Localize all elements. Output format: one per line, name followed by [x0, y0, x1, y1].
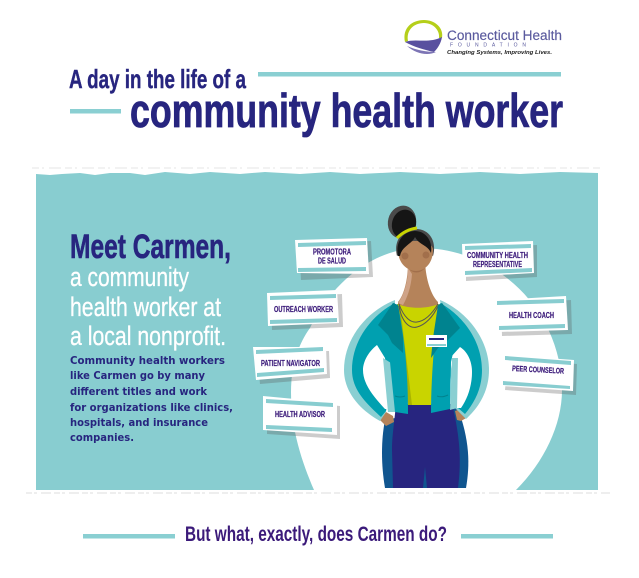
figure: Carmen [344, 202, 489, 488]
text block: Meet Carmen intro: hospitals, and insurance [70, 417, 208, 429]
necklace [399, 304, 438, 322]
text block: Meet Carmen intro: health worker at [70, 292, 221, 322]
head [398, 241, 433, 271]
yellow shirt [397, 304, 439, 405]
card: Community Health Representative: REPRESENTATIVE [473, 260, 522, 269]
text block: Meet Carmen intro: companies. [70, 432, 134, 444]
card: Promotora de Salud: DE SALUD [318, 256, 346, 266]
name tag [426, 335, 447, 347]
right sleeve [440, 300, 489, 419]
card: Outreach Worker [267, 290, 343, 330]
logo: Connecticut Health Foundation: FOUNDATION [450, 42, 526, 48]
text block: Meet Carmen intro: for organizations like clinics, [70, 402, 233, 414]
torn bottom edge [385, 488, 468, 492]
card: Patient Navigator: PATIENT NAVIGATOR [261, 359, 320, 368]
bun [384, 202, 420, 242]
text block: Meet Carmen intro: a local nonprofit. [70, 321, 226, 351]
card: Community Health Representative [462, 241, 537, 281]
card: Peer Counselor: PEER COUNSELOR [512, 364, 564, 376]
logo: Connecticut Health Foundation: Connecticut Health [447, 28, 562, 43]
hair band [397, 228, 417, 238]
white circle behind Carmen [291, 248, 562, 490]
text block: Meet Carmen intro: like Carmen go by many [70, 370, 205, 382]
card: Health Coach: HEALTH COACH [509, 311, 554, 320]
title [69, 64, 563, 137]
neck [398, 262, 438, 312]
hair front [397, 231, 431, 256]
logo: Connecticut Health Foundation: Changing Systems, Improving Lives. [447, 50, 553, 56]
card: Patient Navigator [253, 347, 330, 384]
pocket lines [395, 395, 448, 397]
card: Health Advisor: HEALTH ADVISOR [275, 410, 325, 419]
card: Health Coach [497, 296, 572, 336]
lapels [378, 303, 403, 353]
hands [380, 412, 394, 426]
card: Outreach Worker: OUTREACH WORKER [274, 305, 333, 314]
jacket fronts [378, 303, 408, 414]
text block: Meet Carmen intro: a community [70, 262, 189, 292]
card: Community Health Representative: COMMUNITY HEALTH [467, 251, 528, 260]
logo: Connecticut Health Foundation [404, 20, 562, 56]
panel: Meet Carmen background [26, 168, 610, 493]
closing question: But what, exactly, does Carmen do? [185, 523, 447, 546]
card: Health Advisor [263, 396, 340, 439]
jacket lining [383, 358, 396, 412]
pants [382, 406, 468, 488]
hair back [396, 229, 434, 256]
text block: Meet Carmen intro [70, 228, 233, 444]
left sleeve [344, 300, 395, 421]
text block: Meet Carmen intro: different titles and work [70, 386, 208, 398]
text block: Meet Carmen intro: Community health workers [70, 355, 225, 367]
title: A day in the life of a [69, 64, 246, 94]
card: Promotora de Salud: PROMOTORA [313, 248, 351, 256]
card: Promotora de Salud [295, 238, 373, 280]
text block: Meet Carmen intro: Meet Carmen, [70, 228, 231, 266]
card: Peer Counselor [502, 355, 577, 395]
